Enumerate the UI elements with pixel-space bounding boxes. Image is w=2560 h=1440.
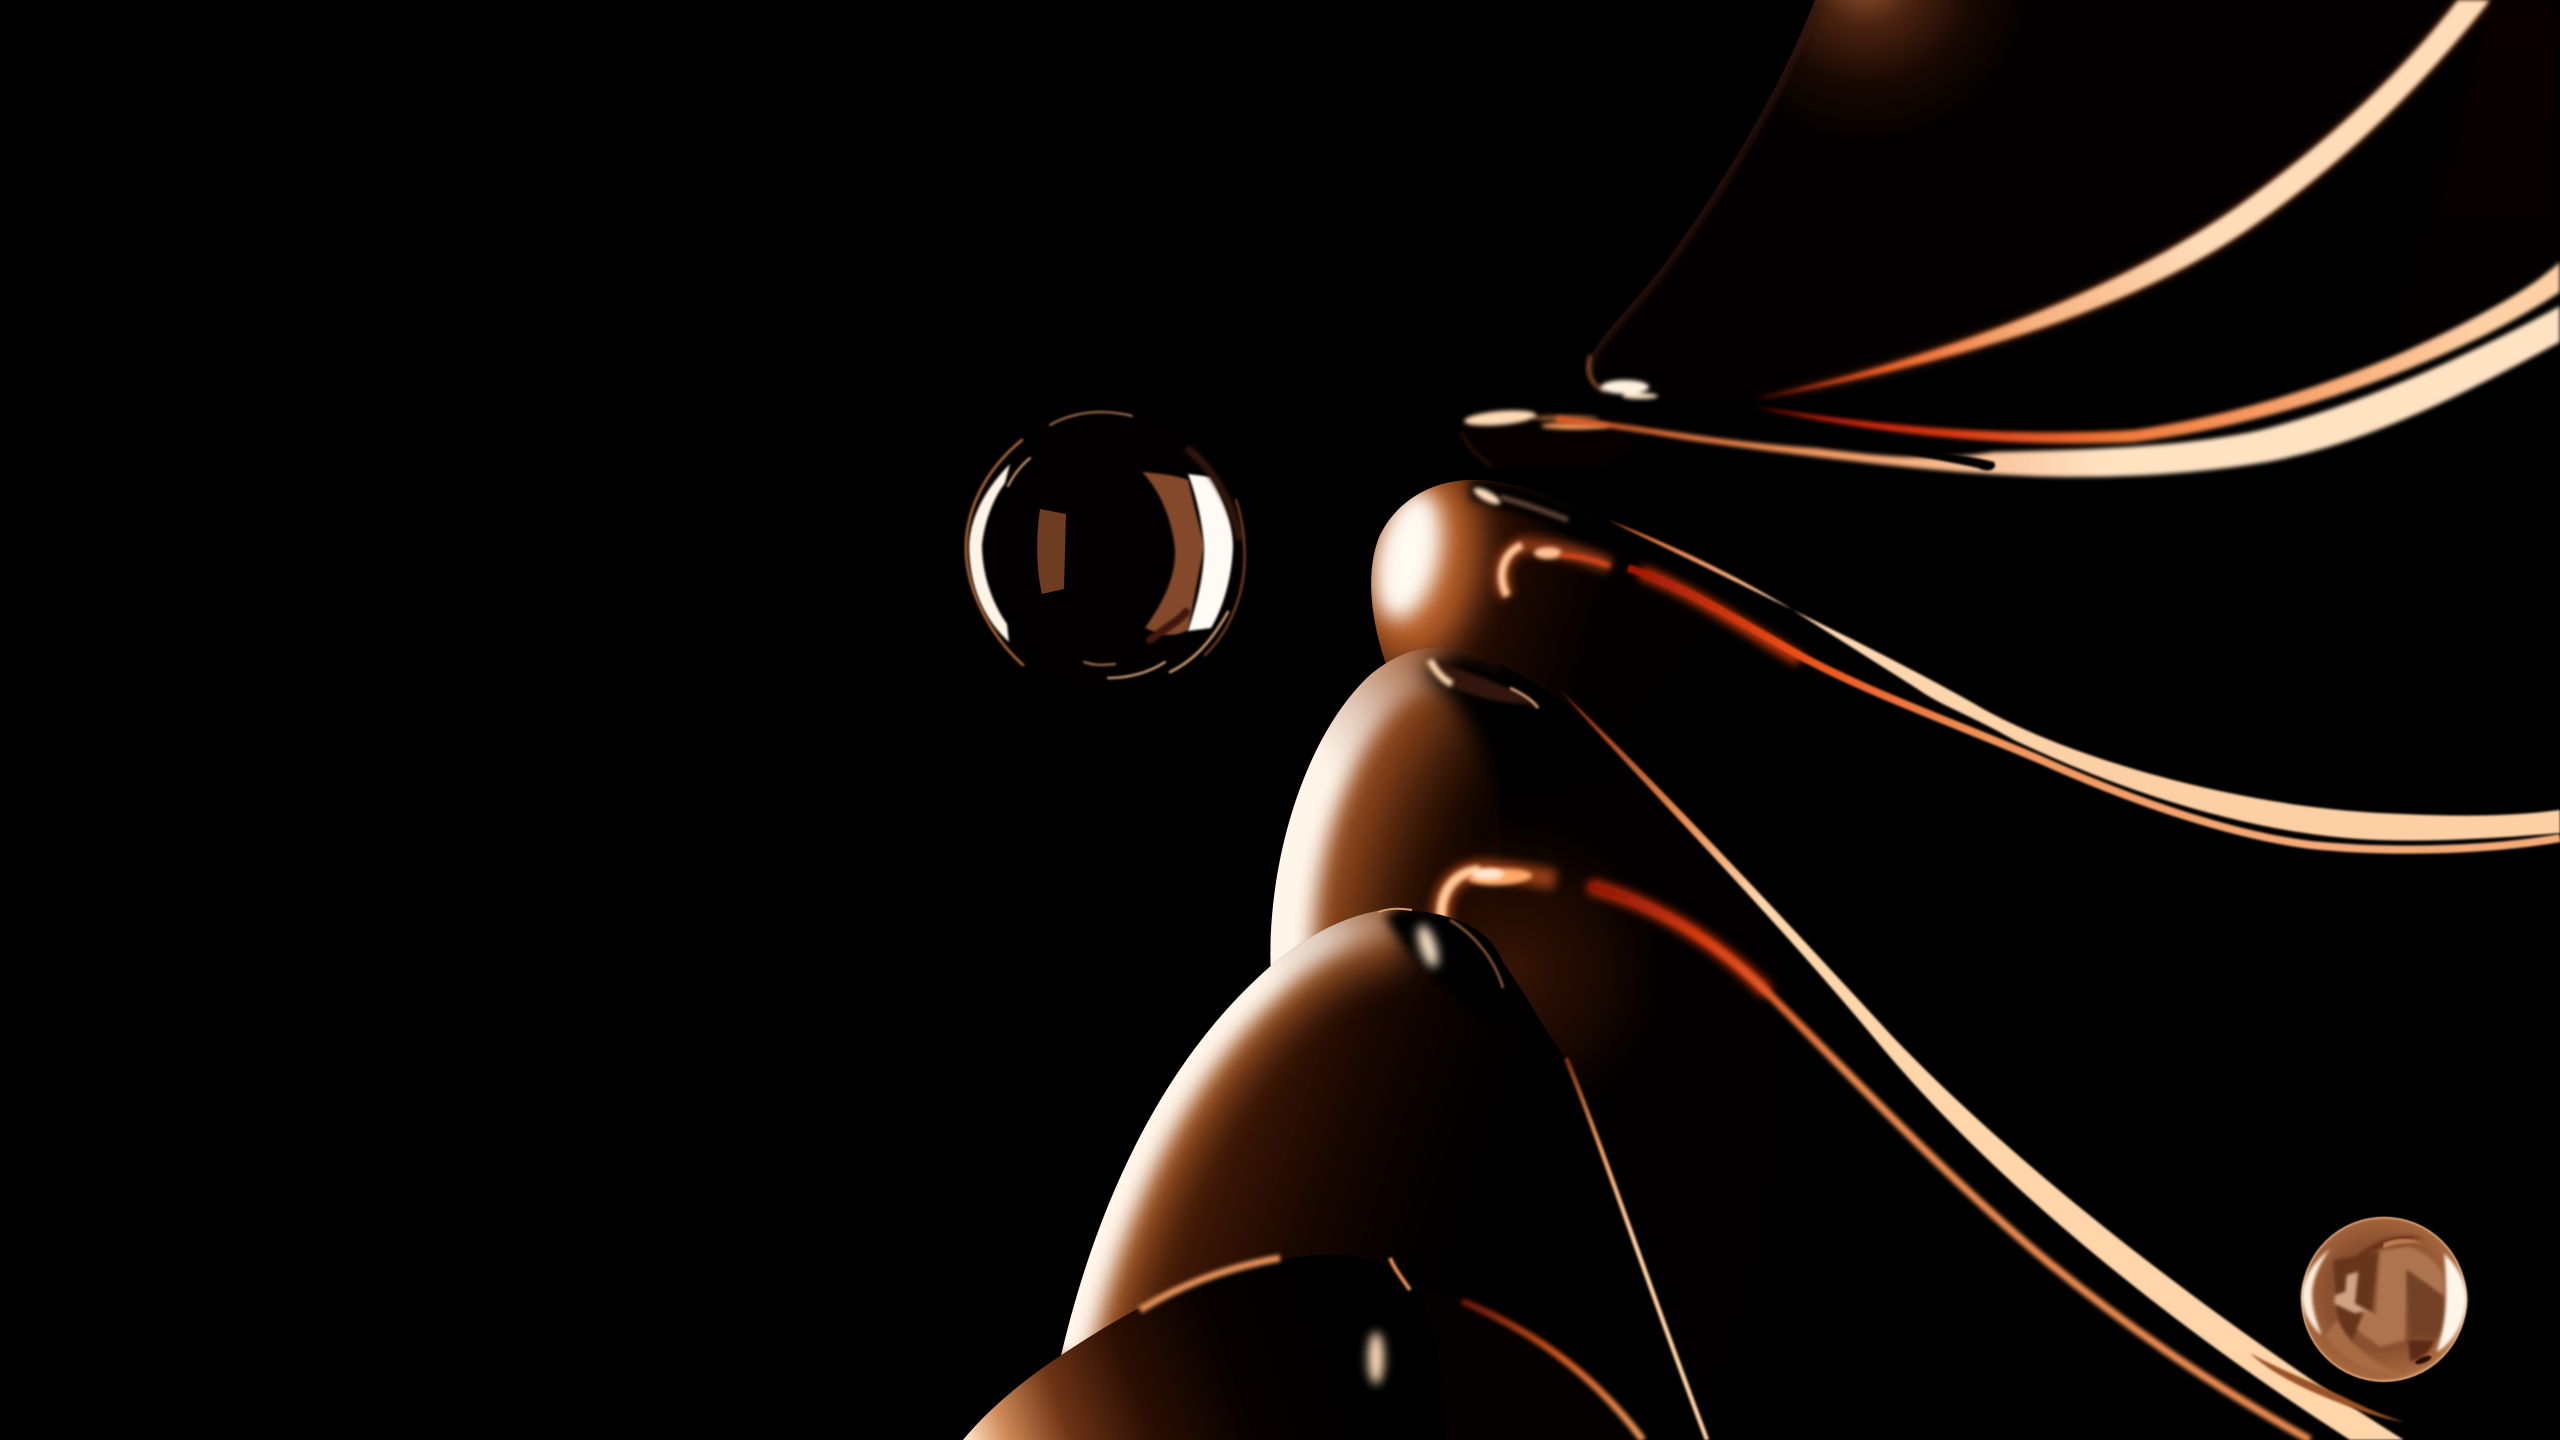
small copper glass ball	[2301, 1217, 2467, 1382]
blob D body	[955, 1255, 1445, 1440]
sphere brown band	[1142, 472, 1204, 635]
blob D small highlight	[1368, 1332, 1384, 1384]
sphere lower reflections	[1084, 612, 1228, 678]
blob A crescent reflection	[1502, 545, 1610, 596]
copper blob A	[1371, 480, 1619, 700]
second dark lobe	[1415, 1290, 1650, 1440]
ball dark wedge	[2407, 1270, 2446, 1339]
S-curve lower orange band	[1628, 568, 2560, 850]
ribbon: S-curve main band	[1608, 520, 2560, 850]
blob C body	[1061, 910, 1574, 1356]
shadow ribbon under small ball	[2250, 1353, 2405, 1422]
ribbon: thin line off blob C	[1566, 1058, 1707, 1440]
diagonal red glow	[1589, 886, 1768, 993]
ribbon: red upper band	[1754, 262, 2560, 443]
sphere upper-right shell	[1186, 448, 1240, 540]
ball upper band	[2353, 1236, 2427, 1262]
blob C cap highlight	[1378, 909, 1503, 988]
ball left light patch	[2334, 1272, 2375, 1315]
ball tall light patch	[2357, 1247, 2444, 1347]
ball rim	[2302, 1218, 2466, 1381]
ribbon: second lobe edge	[1462, 1301, 1643, 1440]
sphere rim	[966, 412, 1245, 665]
top form glow	[1585, 0, 2017, 378]
copper blob D	[955, 1255, 1445, 1440]
ball right highlight	[2437, 1253, 2467, 1352]
ribbon: top arc	[1751, 0, 2490, 400]
ball dark stripes	[2333, 1252, 2378, 1353]
blob B body	[1270, 647, 1646, 1086]
dark corner right of arc	[2380, 0, 2560, 365]
ball dark spot	[2414, 1354, 2432, 1366]
copper blob C	[1061, 908, 1574, 1356]
ball base	[2301, 1217, 2467, 1382]
blob B cap reflection	[1430, 658, 1538, 708]
blob D rim highlight	[1140, 1258, 1280, 1310]
dark sliver inside band	[1880, 448, 1995, 470]
dark glass sphere	[964, 410, 1246, 692]
flat pebble and its highlight	[1459, 408, 1660, 470]
S-curve red glow	[1640, 572, 1800, 660]
diagonal orange line	[1589, 886, 2310, 1440]
blob D inner edge	[1390, 1258, 1410, 1290]
sphere small reflection	[1037, 509, 1066, 594]
copper blob B	[1270, 647, 1646, 1086]
blob A body	[1371, 480, 1594, 700]
ribbon: long diagonal orange band	[1589, 886, 2310, 1440]
pebble highlight	[1461, 408, 1609, 466]
sphere left crescent	[969, 464, 1010, 642]
top copper form	[1560, 0, 2560, 420]
artwork: copper glass forms on black	[963, 0, 2560, 1440]
pebble body	[1459, 410, 1660, 470]
blob B lower reflection	[1441, 867, 1555, 925]
ball left highlight	[2302, 1248, 2331, 1335]
ribbon: main bright band	[1556, 306, 2560, 477]
sphere inner	[968, 444, 1243, 681]
ball lower tone	[2325, 1320, 2407, 1377]
sphere white band	[1188, 474, 1233, 631]
base highlight of top form	[1589, 355, 1658, 399]
ribbon: long diagonal band	[1560, 690, 2404, 1440]
